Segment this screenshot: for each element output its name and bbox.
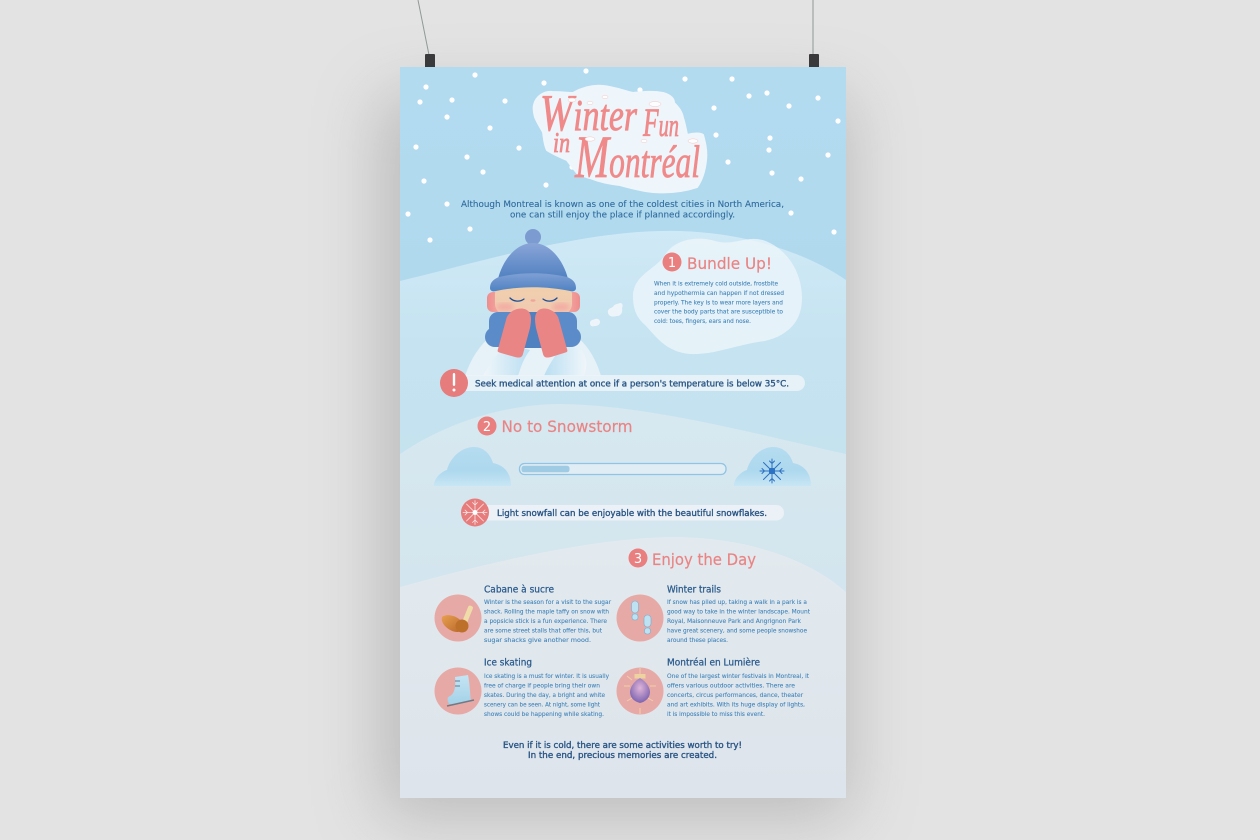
intro text bbox=[461, 200, 784, 220]
word: Winter: Winter bbox=[540, 85, 638, 142]
eyes bbox=[510, 298, 557, 301]
panel: Cabane à sucre bbox=[434, 584, 612, 644]
icon: light bulb bbox=[616, 668, 664, 714]
hanging wires and clips bbox=[418, 0, 819, 71]
icon: left cloud bbox=[434, 447, 511, 486]
heading: No to Snowstorm: No to Snowstorm bbox=[502, 417, 632, 436]
left mitten bbox=[498, 309, 531, 358]
body text: cover the body parts that are susceptible to bbox=[654, 310, 783, 316]
body text: Ice skating is a must for winter. It is usually bbox=[484, 674, 610, 680]
hill 2 bbox=[400, 404, 846, 592]
closing text: Even if it is cold, there are some activities worth to try! bbox=[503, 741, 742, 751]
closing text: In the end, precious memories are created. bbox=[528, 751, 717, 761]
body text: If snow has piled up, taking a walk in a park is a bbox=[667, 600, 807, 606]
icon: ice skate bbox=[434, 668, 482, 714]
poster shadow bbox=[380, 95, 850, 817]
heading: Enjoy the Day: 3 bbox=[634, 552, 642, 567]
body text bbox=[667, 674, 810, 718]
body text: When it is extremely cold outside, frostbite bbox=[654, 282, 778, 288]
progress bar bbox=[520, 464, 726, 474]
face bbox=[495, 287, 572, 312]
number badge 1 bbox=[662, 252, 682, 272]
character illustration bbox=[465, 229, 601, 376]
hat brim bbox=[490, 273, 576, 291]
body text: offers various outdoor activities. There are bbox=[667, 684, 795, 690]
body text: shows could be happening while skating. bbox=[484, 712, 604, 718]
panel: Ice skating: Ice skating bbox=[484, 658, 532, 668]
body text: concerts, circus performances, dance, theater bbox=[667, 693, 804, 699]
body text: properly. The key is to wear more layers and bbox=[654, 300, 783, 306]
poster artwork bbox=[400, 67, 846, 798]
title sticker bbox=[534, 85, 706, 192]
number badge 1: 1 bbox=[668, 256, 676, 271]
body text: sugar shacks give another mood. bbox=[484, 638, 591, 644]
body text: and art exhibits. With its huge display of lights, bbox=[667, 702, 805, 708]
icon: exclamation mark bbox=[440, 369, 468, 397]
intro text: Although Montreal is known as one of the coldest cities in North America, bbox=[461, 200, 784, 210]
ear muffs bbox=[487, 292, 580, 312]
body text: a popsicle stick is a fun experience. There bbox=[484, 619, 607, 625]
icon: snowflake badge bbox=[461, 498, 489, 526]
heading: No to Snowstorm: 2 bbox=[483, 420, 491, 435]
panel: Ice skating bbox=[434, 658, 610, 718]
body text bbox=[667, 600, 811, 644]
pompom bbox=[525, 229, 541, 245]
body text bbox=[484, 600, 612, 644]
panel: bundle up speech blob bbox=[633, 239, 802, 354]
body text: One of the largest winter festivals in Montreal, it bbox=[667, 674, 810, 680]
hill 1 bbox=[400, 231, 846, 454]
panel: Winter trails bbox=[616, 584, 811, 644]
body text: it is impossible to miss this event. bbox=[667, 712, 765, 718]
icon: maple taffy bbox=[434, 594, 482, 642]
body text bbox=[654, 282, 784, 325]
cheeks bbox=[496, 303, 570, 311]
right mitten bbox=[535, 309, 567, 358]
body text: good way to take in the winter landscape. Mount bbox=[667, 610, 811, 616]
body text: around these places. bbox=[667, 638, 728, 644]
panel: Montréal en Lumière: Montréal en Lumière bbox=[667, 658, 760, 668]
body text: are some street stalls that offer this, but bbox=[484, 628, 603, 634]
callout: light snowfall bbox=[461, 498, 784, 526]
body text: Royal, Maisonneuve Park and Angrignon Park bbox=[667, 619, 802, 625]
callout: medical warning bbox=[440, 369, 805, 397]
icon: right cloud with snowflake bbox=[734, 447, 811, 486]
sky background bbox=[400, 67, 846, 281]
nose bbox=[530, 299, 536, 302]
snow mound bbox=[466, 340, 600, 375]
body text bbox=[484, 674, 610, 718]
heading: Bundle Up!: Bundle Up! bbox=[687, 254, 772, 273]
word: Fun: Fun bbox=[642, 100, 679, 145]
intro text: one can still enjoy the place if planned accordingly. bbox=[510, 210, 735, 220]
body text: scenery can be seen. At night, some light bbox=[484, 702, 601, 708]
body text: have great scenery, and some people snowshoe bbox=[667, 628, 807, 634]
body text: shack. Rolling the maple taffy on snow with bbox=[484, 610, 609, 616]
hill 3 bbox=[400, 537, 846, 798]
scarf bbox=[485, 312, 581, 348]
body text: free of charge if people bring their own bbox=[484, 684, 600, 690]
snow caps bbox=[568, 95, 698, 143]
panel: Cabane à sucre: Cabane à sucre bbox=[484, 584, 554, 596]
word: Montréal: Montréal bbox=[574, 124, 700, 190]
body text: cold: toes, fingers, ears and nose. bbox=[654, 319, 751, 325]
icon: footprints bbox=[616, 594, 664, 642]
snow dots bbox=[405, 68, 841, 243]
closing text bbox=[503, 741, 742, 761]
body text: skates. During the day, a bright and white bbox=[484, 693, 605, 699]
sticker backing bbox=[534, 86, 706, 192]
hat dome bbox=[498, 243, 568, 279]
body text: and hypothermia can happen if not dressed bbox=[654, 291, 784, 297]
body text: Winter is the season for a visit to the sugar bbox=[484, 600, 612, 606]
panel: Montréal en Lumière bbox=[616, 658, 810, 718]
callout text: Light snowfall can be enjoyable with the beautiful snowflakes. bbox=[497, 509, 767, 519]
poster bbox=[400, 67, 846, 798]
breath puffs bbox=[590, 303, 623, 326]
callout text: Seek medical attention at once if a person's temperature is below 35°C. bbox=[475, 380, 789, 390]
heading: Enjoy the Day: Enjoy the Day bbox=[652, 550, 756, 569]
word: in: in bbox=[553, 128, 570, 159]
panel: Winter trails: Winter trails bbox=[667, 584, 721, 596]
